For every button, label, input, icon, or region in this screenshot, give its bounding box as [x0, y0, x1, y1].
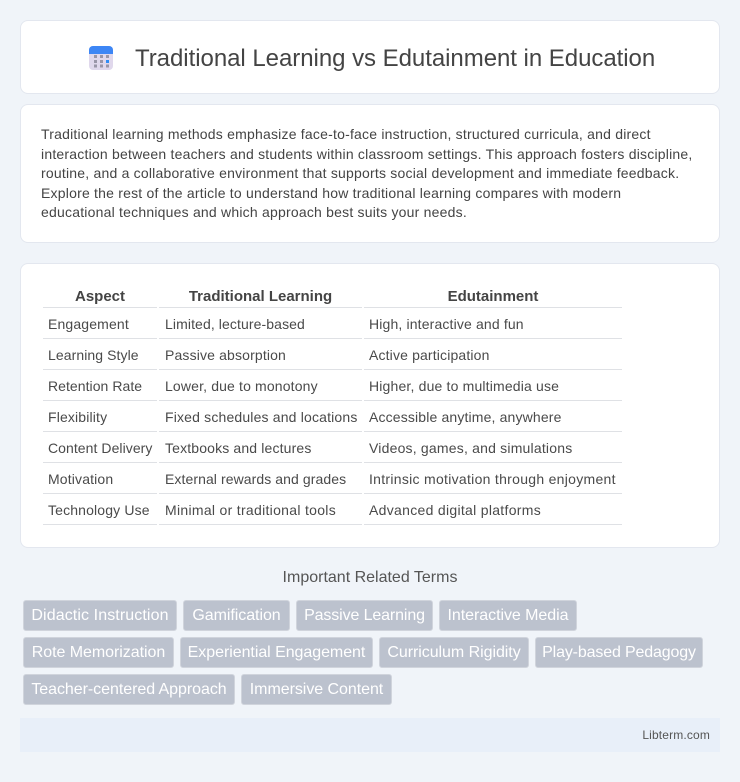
row: motivation: Motivation	[48, 471, 113, 487]
title: Traditional Learning vs Edutainment in Education	[135, 45, 655, 72]
tag: Gamification	[192, 607, 281, 624]
tag	[23, 600, 177, 631]
tag: Play-based Pedagogy	[542, 644, 696, 661]
tag: Teacher-centered Approach	[31, 681, 227, 698]
tag	[241, 674, 392, 705]
tag	[535, 637, 703, 668]
title card	[20, 20, 720, 94]
row: flexibility: Flexibility	[48, 409, 107, 425]
header row: Traditional Learning	[189, 288, 332, 305]
row: flexibility: Fixed schedules and locations	[165, 409, 358, 425]
row: motivation: External rewards and grades	[165, 471, 346, 487]
row: retention rate: Lower, due to monotony	[165, 378, 318, 394]
row: motivation: Intrinsic motivation through enjoyment	[369, 471, 616, 487]
tag	[180, 637, 373, 668]
footer bar	[20, 718, 720, 752]
row: learning style: Learning Style	[48, 347, 139, 363]
intro text: interaction between teachers and students within classroom settings. This approach fosters discipline,	[41, 146, 692, 162]
row: flexibility: Accessible anytime, anywhere	[369, 409, 562, 425]
tag: Didactic Instruction	[31, 607, 169, 624]
intro text: routine, and a collaborative environment that supports social development and immediate feedback.	[41, 165, 679, 181]
tag: Curriculum Rigidity	[387, 644, 521, 661]
intro text	[41, 126, 692, 220]
tag	[296, 600, 433, 631]
row: technology use: Minimal or traditional tools	[165, 502, 336, 518]
header row: Aspect	[75, 288, 125, 305]
comparison table card	[20, 263, 720, 548]
comparison table	[43, 288, 622, 525]
tag: Experiential Engagement	[188, 644, 365, 661]
row: content delivery: Videos, games, and simulations	[369, 440, 572, 456]
tag: Immersive Content	[250, 681, 383, 698]
row: technology use	[48, 502, 541, 518]
icon: calendar	[89, 46, 113, 70]
row: learning style: Passive absorption	[165, 347, 286, 363]
row: learning style	[48, 347, 490, 363]
tag: Interactive Media	[448, 607, 568, 624]
row: engagement: High, interactive and fun	[369, 316, 524, 332]
row: content delivery: Textbooks and lectures	[165, 440, 312, 456]
related terms tags	[23, 600, 703, 705]
header row: Edutainment	[448, 288, 538, 305]
row: flexibility	[48, 409, 562, 425]
row: retention rate: Higher, due to multimedia use	[369, 378, 559, 394]
row: engagement	[48, 316, 524, 332]
tag	[379, 637, 529, 668]
intro text: Explore the rest of the article to understand how traditional learning compares with modern	[41, 185, 621, 201]
tag	[23, 637, 174, 668]
row: motivation	[48, 471, 616, 487]
related terms heading: Important Related Terms	[283, 569, 457, 586]
footer credit: Libterm.com	[642, 728, 710, 742]
row: engagement: Engagement	[48, 316, 129, 332]
tag: Rote Memorization	[32, 644, 165, 661]
tag	[23, 674, 235, 705]
tag	[183, 600, 290, 631]
row: retention rate: Retention Rate	[48, 378, 142, 394]
tag	[439, 600, 577, 631]
intro text: Traditional learning methods emphasize face-to-face instruction, structured curricula, and direct	[41, 126, 651, 142]
row: engagement: Limited, lecture-based	[165, 316, 305, 332]
intro card	[20, 104, 720, 243]
row: technology use: Advanced digital platforms	[369, 502, 541, 518]
row: content delivery: Content Delivery	[48, 440, 152, 456]
row: retention rate	[48, 378, 559, 394]
header row	[75, 288, 538, 305]
intro text: educational techniques and which approach best suits your needs.	[41, 204, 467, 220]
tag: Passive Learning	[304, 607, 425, 624]
row: content delivery	[48, 440, 572, 456]
row: learning style: Active participation	[369, 347, 490, 363]
row: technology use: Technology Use	[48, 502, 150, 518]
